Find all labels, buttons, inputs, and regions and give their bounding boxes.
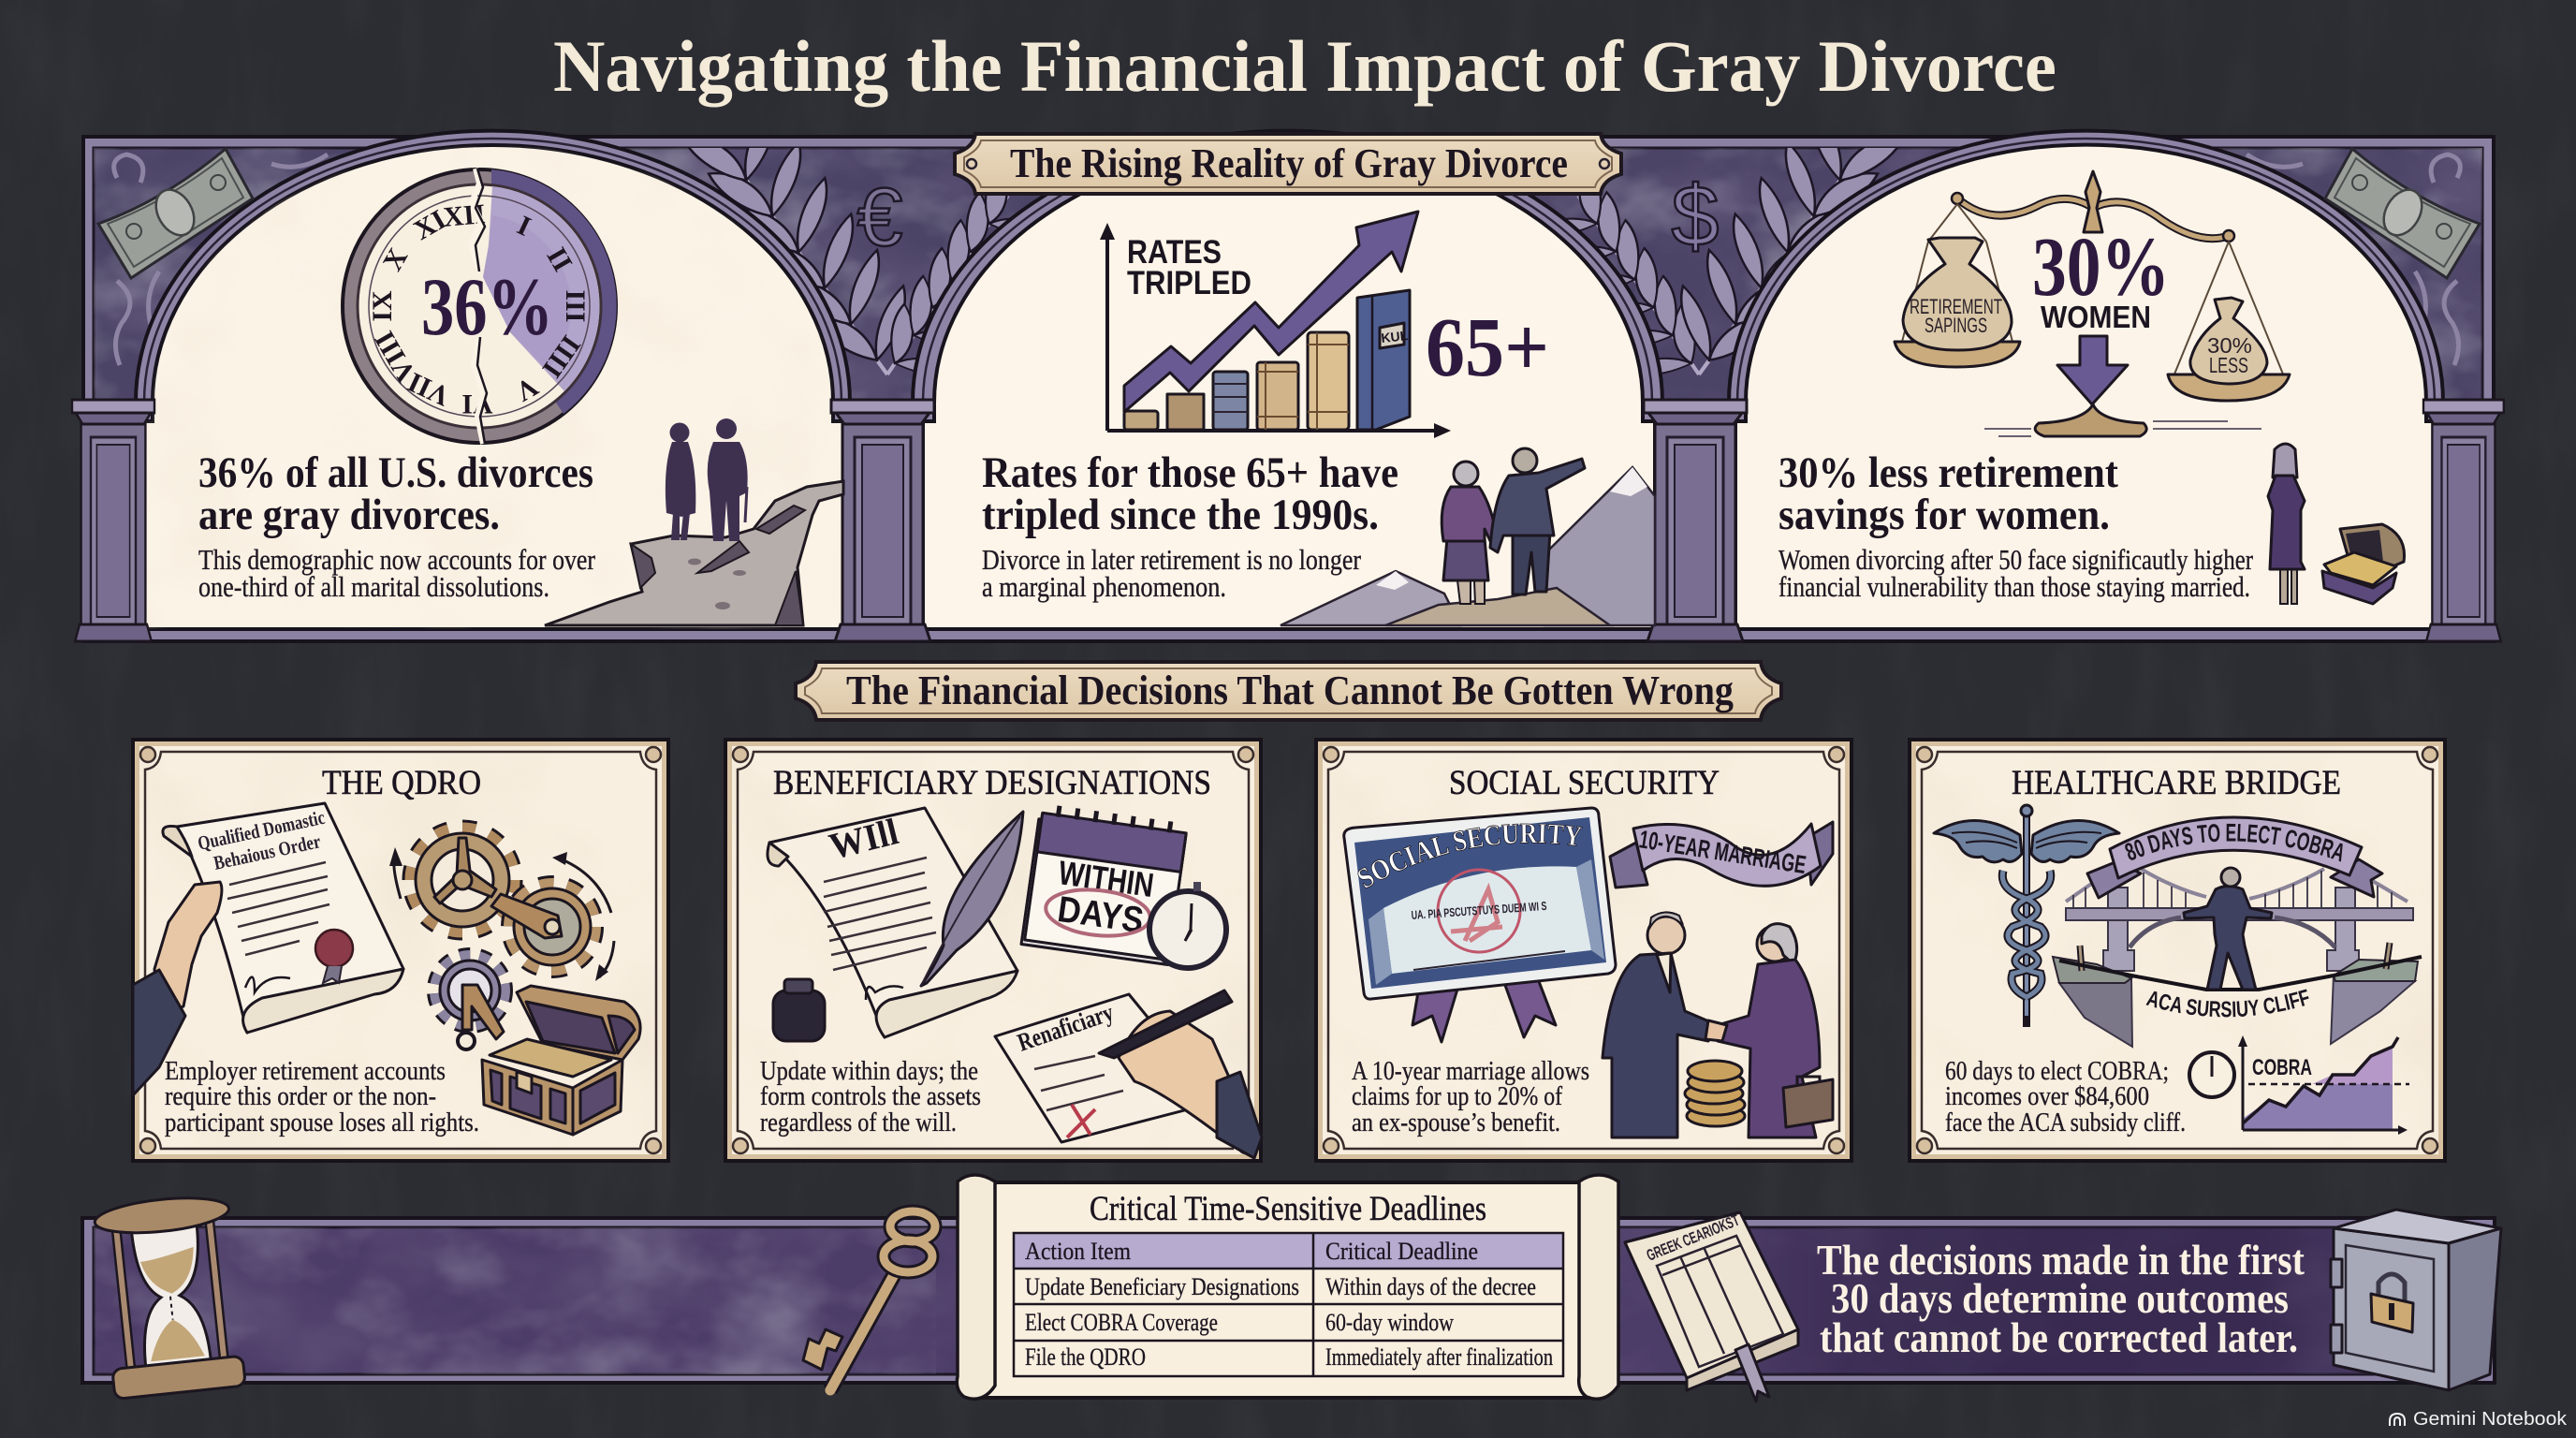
section banner: rising reality [955,134,1621,194]
card: beneficiary designations [725,740,1262,1161]
deadlines table [1014,1233,1563,1376]
icon: bridge [2066,869,2413,971]
ribbon: 10-year marriage: 10-YEAR MARRIAGE [1637,825,1808,879]
card text: A 10-year marriage allows [1352,1056,1589,1086]
banner: 80 days to elect COBRA [2086,816,2384,900]
icon: beneficiary form and hand: Renaficiary [1014,998,1118,1057]
icon: treasure chest small [2322,524,2405,604]
card frame [725,740,1261,1161]
icon: couple silhouette [666,418,748,541]
icon: euro symbol: € [857,170,902,263]
arch 1: 36 percent of divorces [198,169,843,625]
bag labels: 30% [2207,333,2252,358]
callout: first 30 days: The decisions made in the first [1817,1237,2305,1284]
icon: cracked clock: IX [367,290,398,322]
icon: dollar bill left [98,149,253,278]
left roll [957,1175,995,1399]
heading: Rates for those 65+ have [982,448,1398,497]
heading: tripled since the 1990s. [982,491,1379,539]
icon: cracked clock: VII [403,366,455,412]
card text: 60 days to elect COBRA; [1945,1056,2169,1086]
card text: form controls the assets [760,1081,981,1111]
columns [72,400,2504,641]
icon: beneficiary form and hand [995,990,1262,1158]
icon: cracked clock: V [510,371,543,407]
icon: will scroll with quill: WIll [825,810,902,868]
icon: briefcase [1783,1077,1833,1127]
down arrow [2057,336,2128,404]
ornament swirls [114,154,2460,365]
rates tripled label: RATES [1127,234,1222,271]
deadlines table: 60-day window [1325,1309,1454,1336]
bag labels: LESS [2209,353,2248,377]
card text: require this order or the non- [165,1081,436,1111]
icon: ledger book [1625,1211,1798,1401]
heading: are gray divorces. [198,491,500,539]
icon: calendar within days: WITHIN [1056,853,1156,904]
icon: social security card: SOCIAL SECURITY [1357,824,1583,888]
icon: coin stack [1685,1061,1745,1126]
icon: caduceus [1934,805,2119,1027]
deadlines table: Within days of the decree [1325,1273,1536,1300]
woman [1442,462,1498,604]
deadlines table: Immediately after finalization [1325,1343,1553,1371]
rising arrow [1124,212,1418,412]
icon: locked safe [2331,1210,2501,1390]
icon: cracked clock: X [377,242,414,276]
card: social security [1314,738,1853,1163]
icon: cracked clock: XI [409,204,451,246]
card text: Employer retirement accounts [165,1056,446,1086]
card text: claims for up to 20% of [1352,1081,1562,1111]
icon: will scroll with quill [768,808,1023,1041]
arch 2: rates tripled chart [982,212,1655,625]
bag labels: SAPINGS [1925,314,1987,337]
man [1490,448,1585,594]
body text: Women divorcing after 50 face significautly higher [1778,543,2254,576]
bag labels: RETIREMENT [1910,295,2002,318]
36 percent number: 36% [421,262,553,353]
icon: balance scale [1895,171,2290,436]
icon: cracked clock: II [540,242,578,277]
section banner: financial decisions: The Financial Decisions That Cannot Be Gotten Wrong [846,668,1734,713]
icon: cracked clock: VIII [369,326,422,388]
card title: BENEFICIARY DESIGNATIONS [773,764,1211,802]
icon: cliff path [545,481,843,625]
card text: face the ACA subsidy cliff. [1945,1108,2186,1137]
body text: Divorce in later retirement is no longer [982,543,1362,576]
icon: cliffs and tightrope [2053,943,2422,1047]
book bar chart [1100,212,1451,438]
icon: cracked clock: I [513,210,535,242]
icon: legal document in hand [133,803,403,1095]
card text: Update within days; the [760,1056,978,1086]
hand [154,882,222,1016]
card: the QDRO [133,740,668,1161]
icon: small clock [2189,1052,2234,1097]
icon: treasure chest [482,986,640,1135]
icon: person on tightrope [2184,868,2272,990]
icon: cracked clock: XII [442,198,487,233]
icon: mountains and older couple [1281,448,1655,625]
women label: WOMEN [2041,300,2151,334]
section banner: rising reality: The Rising Reality of Gray Divorce [1010,140,1568,186]
icon: ledger book: GREEK CEARIOKST [1644,1211,1742,1265]
book bars: KULI [1381,328,1412,345]
card title: HEALTHCARE BRIDGE [2012,764,2341,802]
card title: THE QDRO [322,764,481,802]
30 percent number: 30% [2032,221,2170,314]
deadlines table: Elect COBRA Coverage [1025,1309,1218,1336]
icon: gears [389,828,614,1049]
scroll: critical time-sensitive deadlines [957,1175,1618,1399]
icon: social security card [1342,807,1617,1043]
callout: first 30 days: 30 days determine outcomes [1831,1275,2289,1322]
body text: This demographic now accounts for over [198,543,596,576]
deadlines table: Update Beneficiary Designations [1025,1273,1299,1300]
banner: 80 days to elect COBRA: 80 DAYS TO ELECT COBRA [2125,824,2343,861]
card frame [1910,740,2445,1161]
icon: woman looking at chest [2268,444,2305,604]
arch 3: retirement savings scale [1778,171,2405,604]
icon: cracked clock: III [560,289,591,323]
rates tripled label: TRIPLED [1127,265,1251,301]
book bars [1124,290,1412,430]
arcade frame [83,137,2494,641]
icon: social security card: UA. PIA PSCUTSTUYS DUEM WI S [1411,899,1547,922]
deadlines table: Action Item [1025,1238,1131,1265]
laurel branches [668,81,1918,409]
bag labels [1910,295,2252,377]
icon: legal document in hand: Behaious Order [212,829,323,874]
panel: the rising reality of gray divorce [72,81,2504,641]
65 plus number: 65+ [1426,301,1549,394]
icon: hourglass [94,1193,247,1400]
chart: COBRA cost line [2238,1035,2409,1135]
label: ACA subsidy cliff: ACA SURSIUY CLIFF [2145,989,2309,1017]
icon: legal document in hand: Qualified Domastic [196,806,327,855]
right roll [1579,1175,1618,1399]
body text: financial vulnerability than those staying married. [1778,570,2250,603]
card: healthcare bridge [1908,738,2447,1163]
card text: incomes over $84,600 [1945,1081,2149,1111]
body text: a marginal phenomenon. [982,570,1226,603]
callout: first 30 days: that cannot be corrected later. [1820,1314,2298,1361]
ribbon: 10-year marriage [1610,822,1833,888]
card text: regardless of the will. [760,1108,957,1137]
icon: couple handshake [1603,912,1820,1137]
card text: an ex-spouse’s benefit. [1352,1108,1560,1137]
card frame [133,740,668,1161]
chart: COBRA cost line: COBRA [2252,1055,2312,1080]
icon: calendar within days: DAYS [1055,889,1146,941]
icon: cracked clock: VI [461,389,493,419]
heading: savings for women. [1778,491,2110,539]
icon: dollar symbol: $ [1671,169,1720,264]
gemini notebook watermark: Gemini Notebook [2413,1409,2568,1430]
body text: one-third of all marital dissolutions. [198,570,549,603]
icon: cracked clock [343,169,617,444]
axes [1100,223,1451,438]
title: Navigating the Financial Impact of Gray Divorce [553,25,2056,107]
card frame [1316,740,1852,1161]
card title: SOCIAL SECURITY [1449,764,1720,802]
icon: cracked clock: IIII [536,330,587,383]
parchment [983,1182,1591,1398]
deadlines table: Critical Deadline [1325,1238,1478,1265]
deadlines table: File the QDRO [1025,1343,1146,1371]
icon: calendar within days [1021,803,1226,968]
heading: 30% less retirement [1778,448,2118,497]
icon: skeleton key [803,1211,935,1390]
card text: participant spouse loses all rights. [165,1108,479,1137]
table heading: Critical Time-Sensitive Deadlines [1090,1190,1486,1228]
heading: 36% of all U.S. divorces [198,448,593,497]
arch bands and interiors [136,131,2443,629]
bottom banner [82,1218,2495,1383]
icon: dollar bill right [2325,149,2480,278]
